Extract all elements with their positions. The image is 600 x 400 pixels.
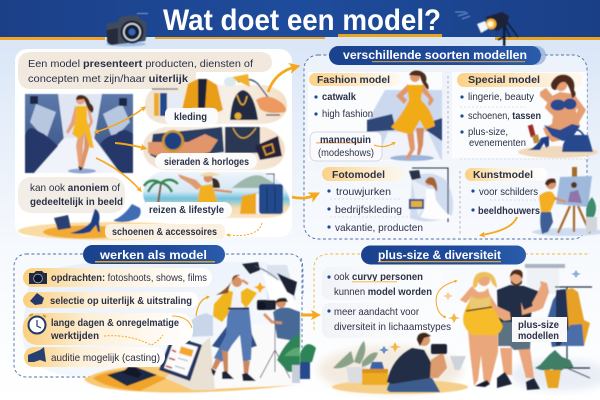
item: opdrachten xyxy=(23,268,212,287)
label: reizen & lifestyle xyxy=(140,202,232,218)
panel: verschillende soorten modellen xyxy=(304,46,600,239)
dividers xyxy=(330,76,590,235)
image: kleding xyxy=(145,74,287,124)
heading banner xyxy=(83,245,225,264)
card: Special model xyxy=(452,72,598,158)
card: Kunstmodel xyxy=(465,167,600,236)
callout: mannequin: (modeshows) xyxy=(318,147,374,159)
intro text: Een model presenteert producten, diensten of xyxy=(28,58,253,70)
card: Fotomodel: bedrijfskleding xyxy=(335,204,402,216)
card: Fotomodel xyxy=(322,167,453,234)
arrow: into text xyxy=(301,314,316,316)
icon: megaphone xyxy=(28,347,46,362)
arrow: dashed to schoenen xyxy=(228,223,262,236)
callout: anoniem: gedeeltelijk in beeld xyxy=(30,196,123,208)
header band xyxy=(0,0,600,40)
image: studio scene plants and rack xyxy=(300,264,592,394)
card: Fashion model: catwalk xyxy=(322,91,356,103)
figure: model in yellow jacket xyxy=(211,275,257,381)
label: sieraden & horloges: sieraden & horloges xyxy=(164,156,249,168)
card: Fotomodel: vakantie, producten xyxy=(335,222,423,234)
arrow: mannequin xyxy=(374,143,394,147)
card: Special model: schoenen, tassen xyxy=(468,110,541,122)
image: painter and easel xyxy=(532,167,600,236)
heading banner: werken als model xyxy=(99,248,207,262)
icon: folded bag xyxy=(107,367,157,386)
label: reizen & lifestyle: reizen & lifestyle xyxy=(149,204,224,216)
item: selectie: selectie op uiterlijk & uitstraling xyxy=(50,295,192,307)
icon: plant xyxy=(277,333,300,383)
item: lange dagen xyxy=(23,313,193,345)
callout: anoniem xyxy=(18,177,125,213)
item: lange dagen: werktijden xyxy=(50,330,99,342)
card: Fotomodel: Fotomodel xyxy=(332,169,385,181)
icon: stopwatch xyxy=(28,314,46,334)
text: diversiteit xyxy=(322,303,462,338)
card: Fashion model: high fashion xyxy=(322,108,373,120)
heading banner: verschillende soorten modellen xyxy=(343,50,527,62)
arrow: runway to sieraden xyxy=(115,143,144,148)
card: Kunstmodel: beeldhouwers xyxy=(478,205,540,217)
arrow: to model xyxy=(196,297,208,316)
image: special model xyxy=(518,75,598,158)
figure: plus-size woman xyxy=(460,272,511,387)
icon: studio spotlight xyxy=(455,12,518,46)
heading banner: plus-size & diversiteit xyxy=(378,248,501,262)
card: Special model: lingerie, beauty xyxy=(468,91,535,103)
panel: wat doet een model xyxy=(15,49,292,240)
image: runway model xyxy=(25,94,133,174)
image: fashion runway xyxy=(367,70,442,161)
card: Fashion model: Fashion model xyxy=(317,74,390,86)
card: Kunstmodel: voor schilders xyxy=(479,186,538,198)
arrow: runway to reizen xyxy=(96,158,140,190)
image: reizen en lifestyle xyxy=(143,172,290,218)
arrow: intro to soorten xyxy=(268,67,295,92)
panel: werken als model xyxy=(14,245,302,393)
text: diversiteit: diversiteit in lichaamstypes xyxy=(334,321,451,333)
card: Fashion model xyxy=(308,70,442,161)
card: Fotomodel: trouwjurken xyxy=(336,186,391,198)
icon: camera xyxy=(106,13,148,46)
panel: plus-size & diversiteit xyxy=(300,246,600,394)
arrow: curved circular xyxy=(436,281,456,317)
image: sieraden en horloges xyxy=(143,127,285,170)
heading banner xyxy=(361,246,526,264)
arrow: curved orange xyxy=(172,316,192,328)
item: lange dagen: lange dagen & onregelmatige xyxy=(51,317,179,329)
arrow: runway to kleding xyxy=(96,108,144,132)
card: Special model: evenementen xyxy=(469,137,526,149)
item: selectie xyxy=(23,292,198,308)
label: plus-size modellen: plus-size xyxy=(518,319,559,331)
label: plus-size modellen: modellen xyxy=(518,330,559,342)
arrow: reizen to soorten xyxy=(292,195,315,198)
callout: mannequin: mannequin xyxy=(320,134,371,146)
figure: kneeling photographer xyxy=(387,333,447,392)
callout: mannequin xyxy=(310,132,382,161)
label: schoenen & accessoires: schoenen & accessoires xyxy=(112,226,217,238)
item: auditie xyxy=(24,347,165,367)
label: kleding: kleding xyxy=(174,111,207,123)
icon: camera xyxy=(29,271,47,284)
label: kleding xyxy=(165,108,218,124)
text: curvy personen: ook curvy personen xyxy=(334,271,423,283)
item: auditie: auditie mogelijk (casting) xyxy=(51,352,160,364)
label: sieraden & horloges xyxy=(155,153,257,169)
image: bride xyxy=(409,168,453,222)
heading banner xyxy=(329,46,546,65)
item: opdrachten: opdrachten: fotoshoots, shows, films xyxy=(51,272,207,284)
icon: diamond sparkle xyxy=(254,282,266,293)
title: Wat doet een model? xyxy=(163,4,441,37)
icon: clipboard xyxy=(159,336,202,381)
image: schoenen en accessoires xyxy=(18,204,202,240)
image: photoshoot scene xyxy=(84,262,300,393)
card: Special model: plus-size, xyxy=(468,126,508,138)
text: curvy personen: kunnen model worden xyxy=(334,286,432,298)
intro text xyxy=(18,52,272,89)
figure: man xyxy=(497,270,549,390)
label: plus-size modellen xyxy=(512,317,567,342)
text: diversiteit: meer aandacht voor xyxy=(334,306,419,318)
card: Special model: Special model xyxy=(468,74,540,86)
card: Kunstmodel: Kunstmodel xyxy=(473,169,533,181)
icon: tag xyxy=(30,293,44,305)
arrow: dashed xyxy=(104,335,163,345)
intro text: concepten met zijn/haar uiterlijk xyxy=(28,73,188,85)
callout: anoniem: kan ook anoniem of xyxy=(30,182,120,194)
text: curvy personen xyxy=(322,267,442,300)
arrow: kunstmodel xyxy=(482,217,517,235)
icon: sparkles xyxy=(379,270,581,354)
figure: photographer xyxy=(257,298,300,378)
